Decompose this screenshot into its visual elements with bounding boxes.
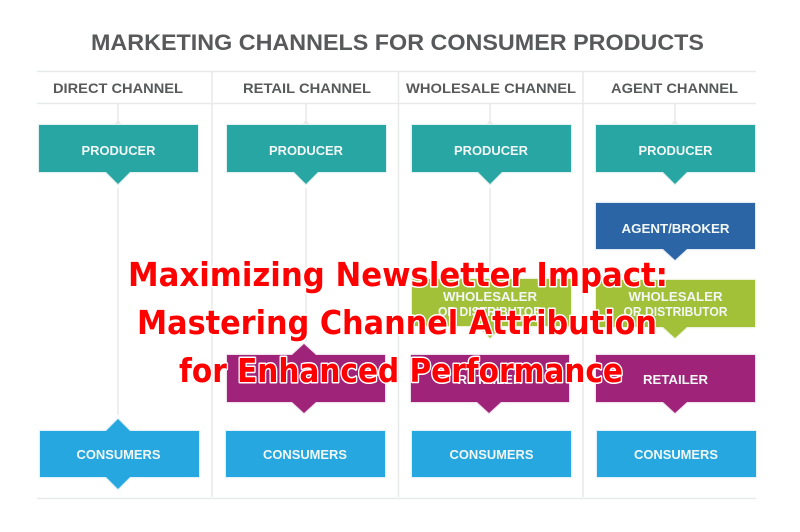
consumers box	[40, 419, 199, 489]
panel: wholesale channel	[411, 125, 571, 477]
producer box	[596, 125, 755, 184]
wholesaler box	[412, 279, 571, 338]
wholesaler box: WHOLESALER	[628, 290, 722, 304]
overlay headline: Maximizing Newsletter Impact:	[128, 255, 668, 294]
retailer box	[227, 344, 385, 413]
heading: agent channel: AGENT CHANNEL	[611, 80, 738, 96]
producer box: PRODUCER	[638, 144, 712, 158]
agent/broker box	[596, 203, 755, 260]
consumers box: CONSUMERS	[263, 448, 347, 462]
heading: retail channel: RETAIL CHANNEL	[243, 80, 371, 96]
producer box: PRODUCER	[82, 144, 156, 158]
consumers box	[597, 431, 756, 477]
retailer box	[411, 355, 569, 413]
overlay headline	[128, 255, 668, 390]
retailer box: RETAILER	[458, 373, 522, 387]
heading: direct channel: DIRECT CHANNEL	[53, 80, 183, 96]
panel: direct channel	[39, 125, 199, 489]
producer box	[39, 125, 198, 184]
title: MARKETING CHANNELS FOR CONSUMER PRODUCTS	[91, 30, 704, 55]
panel: retail channel	[226, 125, 386, 477]
wholesaler box: WHOLESALER	[443, 290, 537, 304]
heading: wholesale channel: WHOLESALE CHANNEL	[406, 80, 576, 96]
overlay headline: Mastering Channel Attribution	[137, 303, 657, 342]
wholesaler box: OR DISTRIBUTOR	[624, 305, 728, 319]
column headings	[53, 80, 738, 96]
consumers box: CONSUMERS	[76, 448, 160, 462]
wholesaler box: OR DISTRIBUTOR	[438, 305, 542, 319]
retailer box	[596, 355, 755, 413]
retailer box: RETAILER	[643, 373, 708, 387]
producer box: PRODUCER	[454, 144, 528, 158]
consumers box	[226, 431, 385, 477]
panel: agent channel	[596, 125, 756, 477]
producer box	[227, 125, 386, 184]
agent/broker box: AGENT/BROKER	[622, 222, 730, 236]
producer box	[412, 125, 571, 184]
consumers box: CONSUMERS	[450, 448, 534, 462]
consumers box	[412, 431, 571, 477]
consumers box: CONSUMERS	[634, 448, 718, 462]
wholesaler box	[596, 280, 755, 338]
producer box: PRODUCER	[269, 144, 343, 158]
overlay headline: for Enhanced Performance	[179, 351, 623, 390]
